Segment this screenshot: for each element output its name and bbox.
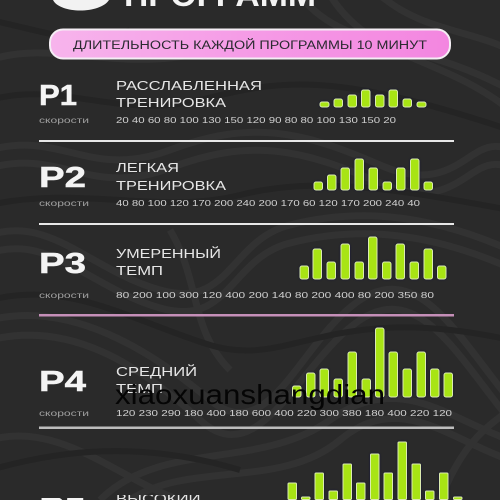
bars P2 <box>314 159 432 190</box>
program P3: 80 200 100 300 120 400 200 140 80 200 400 80 200 350 80 <box>116 290 434 300</box>
program P2: ТРЕНИРОВКА <box>116 179 227 193</box>
program P3: P3 <box>39 248 86 280</box>
program P2: P2 <box>39 162 86 194</box>
program P4: скорости <box>39 409 89 418</box>
program P4 <box>39 328 452 418</box>
program P2: скорости <box>39 199 89 208</box>
duration pill: ДЛИТЕЛЬНОСТЬ КАЖДОЙ ПРОГРАММЫ 10 МИНУТ <box>73 39 427 52</box>
bars P1 <box>320 90 426 107</box>
program P1: ТРЕНИРОВКА <box>116 96 227 110</box>
top badge shape <box>53 0 109 10</box>
bars P5 <box>288 442 462 500</box>
program P4: ТЕМП <box>116 382 163 396</box>
program P1: скорости <box>39 116 89 125</box>
bars P4 <box>292 328 452 397</box>
program P1 <box>39 79 426 125</box>
program P1: P1 <box>39 80 77 112</box>
program P2 <box>39 159 432 208</box>
program P3 <box>39 237 446 300</box>
program P1: РАССЛАБЛЕННАЯ <box>116 79 262 93</box>
program P3: скорости <box>39 291 89 300</box>
program P3: ТЕМП <box>116 264 163 278</box>
program P4: P4 <box>39 366 86 398</box>
program P1: 20 40 60 80 100 130 150 120 90 80 80 100 130 150 20 <box>116 115 396 125</box>
program P4: СРЕДНИЙ <box>116 364 197 379</box>
program P3: УМЕРЕННЫЙ <box>116 246 221 261</box>
program P2: 40 80 100 120 170 200 240 200 170 60 120 170 200 240 40 <box>116 198 420 208</box>
program P2: ЛЕГКАЯ <box>116 161 179 175</box>
bars P3 <box>300 237 446 279</box>
duration pill <box>50 30 450 58</box>
program P4: 120 230 290 180 400 180 600 400 220 300 380 180 400 220 120 <box>116 408 452 418</box>
watermark: xiaoxuanshangdian <box>115 379 385 410</box>
